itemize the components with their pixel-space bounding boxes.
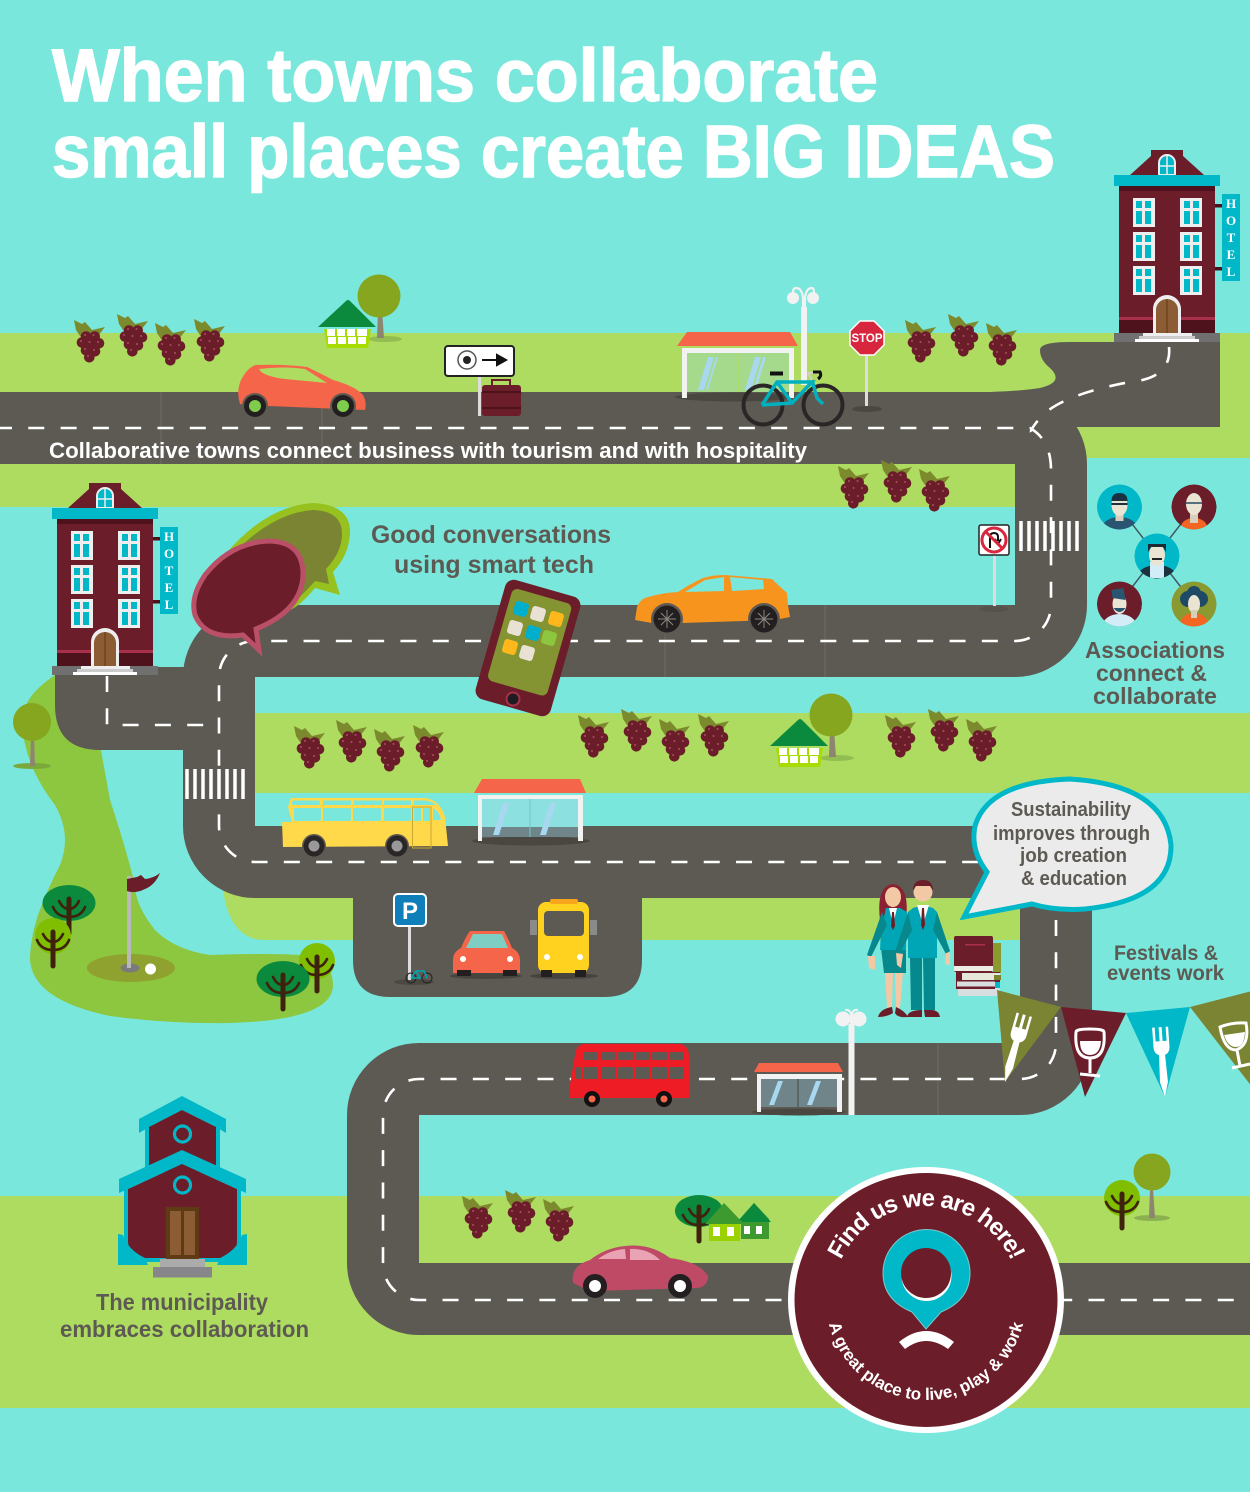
street lamp top (787, 288, 819, 385)
house and tree, top (318, 274, 402, 348)
hotel left: H (164, 529, 174, 544)
hotel left: L (165, 597, 174, 612)
business people (867, 880, 950, 1017)
hotel left: E (165, 580, 173, 595)
hotel right: O (1226, 213, 1236, 228)
golf: trees, hole and flag (35, 873, 335, 1009)
title: small places create BIG IDEAS (52, 110, 1055, 193)
municipality building (118, 1096, 247, 1278)
bus shelter lower (752, 1063, 846, 1116)
caption: municipality: The municipality (96, 1289, 268, 1315)
parked yellow bus (530, 899, 598, 979)
smartphone (473, 578, 583, 718)
direction sign and suitcase (445, 346, 521, 416)
title: When towns collaborate (52, 34, 878, 117)
no U-turn sign (979, 525, 1009, 612)
caption: good conversations: Good conversations (371, 521, 611, 549)
badge tagline: A great place to live, play & work (828, 1322, 1024, 1400)
caption: festivals: events work (1107, 962, 1224, 985)
caption: municipality: embraces collaboration (60, 1316, 309, 1342)
green land strips (0, 333, 1250, 1408)
yellow bus (282, 798, 448, 858)
hotel right: L (1227, 264, 1236, 279)
location pin (883, 1230, 970, 1349)
sustainability speech bubble: job creation (1019, 845, 1127, 867)
caption: associations: collaborate (1093, 683, 1217, 709)
caption: associations: Associations (1085, 637, 1225, 663)
hotel left (52, 483, 178, 675)
sustainability speech bubble: & education (1021, 868, 1127, 890)
parking sign (394, 894, 434, 985)
crosswalks (187, 521, 1077, 799)
find us badge (788, 1167, 1064, 1433)
title (52, 34, 1055, 193)
fork icon (1152, 1027, 1173, 1098)
sustainability speech bubble (964, 779, 1171, 917)
hotel left: T (165, 563, 174, 578)
hotel right (1114, 150, 1240, 342)
man (895, 880, 950, 1017)
standalone tree left (13, 703, 51, 769)
stop sign: STOP (851, 333, 883, 345)
pink sedan (573, 1246, 708, 1298)
speech bubbles (194, 503, 350, 650)
sustainability speech bubble: Sustainability (1011, 799, 1132, 821)
festival bunting (997, 990, 1250, 1098)
caption: festivals: Festivals & (1114, 942, 1218, 965)
wine glass icon (1076, 1029, 1104, 1076)
parking sign: P (402, 898, 418, 925)
caption: good conversations (371, 521, 611, 579)
stack of books (954, 936, 1001, 996)
village houses and tree (675, 1195, 771, 1241)
woman (867, 884, 908, 1017)
caption: associations: connect & (1096, 660, 1207, 686)
house and tree, middle (770, 694, 854, 767)
hotel right: E (1227, 247, 1235, 262)
parked red car (450, 931, 522, 979)
bus shelter top (675, 332, 798, 402)
golf course (22, 672, 333, 1023)
trees bottom right (1104, 1154, 1170, 1228)
road centre dashes (0, 347, 1250, 1300)
people network (1097, 484, 1216, 638)
sustainability speech bubble: improves through (993, 823, 1150, 845)
hotel left: O (164, 546, 174, 561)
badge heading: Find us we are here! (827, 1193, 1026, 1259)
bus shelter middle (472, 779, 590, 846)
grapes (74, 314, 1017, 1242)
caption: good conversations: using smart tech (394, 551, 594, 579)
road network (0, 342, 1250, 1299)
double-decker bus (570, 1044, 689, 1107)
street lamp lower (836, 1010, 866, 1115)
hotel right: T (1227, 230, 1236, 245)
fork icon (997, 1013, 1032, 1084)
road caption: Collaborative towns connect business with tourism and with hospitality (49, 438, 808, 463)
hotel right: H (1226, 196, 1236, 211)
caption: municipality (60, 1289, 309, 1342)
wine glass icon (1220, 1023, 1250, 1068)
caption: festivals (1107, 942, 1224, 985)
stop sign (850, 321, 884, 412)
caption: associations (1085, 637, 1225, 709)
bicycle (744, 372, 842, 424)
red hatchback car (238, 365, 366, 419)
orange car (635, 575, 790, 635)
